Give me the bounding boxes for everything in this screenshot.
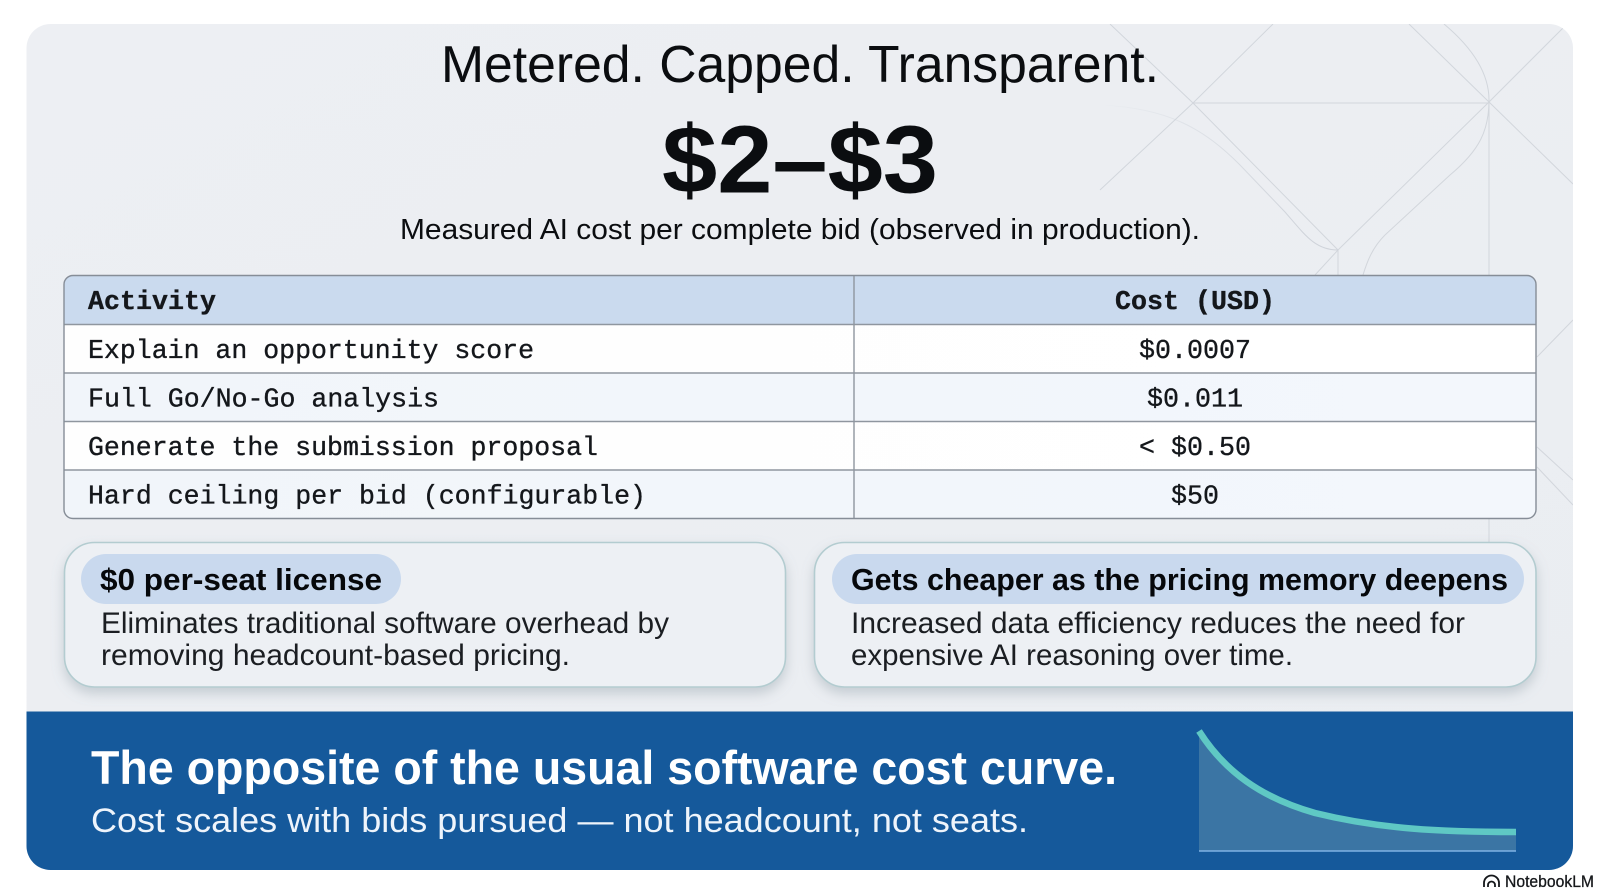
banner heading: The opposite of the usual software cost curve. xyxy=(91,741,1117,794)
table row: explain score: Explain an opportunity score xyxy=(88,336,534,366)
watermark: NotebookLM: NotebookLM xyxy=(1505,872,1594,891)
subtitle: Measured AI cost per complete bid (observed in production). xyxy=(400,214,1200,246)
table row: explain score: $0.0007 xyxy=(1139,336,1251,366)
panel: bottom banner xyxy=(26,712,1573,870)
table header xyxy=(88,287,1275,317)
table header: Activity xyxy=(88,287,216,317)
pill heading: per-seat license xyxy=(81,554,401,604)
table row: go/no-go: $0.011 xyxy=(1147,384,1243,414)
body text: per-seat license xyxy=(101,607,669,672)
body text: per-seat license: removing headcount-based pricing. xyxy=(101,639,570,672)
cost table xyxy=(64,275,1536,518)
pill heading: cheaper over time: Gets cheaper as the pricing memory deepens xyxy=(851,562,1508,597)
pill heading: cheaper over time xyxy=(832,554,1524,604)
table row: proposal xyxy=(88,433,1251,463)
body text: cheaper over time xyxy=(851,607,1465,672)
headline cost figure: $2–$3 xyxy=(662,106,938,214)
title: Metered. Capped. Transparent. xyxy=(441,36,1159,94)
chart: declining cost curve xyxy=(1199,731,1516,851)
body text: cheaper over time: expensive AI reasoning over time. xyxy=(851,639,1293,672)
table row: hard ceiling: $50 xyxy=(1171,482,1219,512)
body text: cheaper over time: Increased data efficiency reduces the need for xyxy=(851,607,1465,640)
table row: hard ceiling: Hard ceiling per bid (configurable) xyxy=(88,482,646,512)
table row: go/no-go xyxy=(88,384,1243,414)
body text: per-seat license: Eliminates traditional software overhead by xyxy=(101,607,669,640)
table row: hard ceiling xyxy=(88,482,1219,512)
table row: go/no-go: Full Go/No-Go analysis xyxy=(88,384,439,414)
banner subheading: Cost scales with bids pursued — not headcount, not seats. xyxy=(91,802,1028,840)
table row: proposal: Generate the submission proposal xyxy=(88,433,598,463)
table row: explain score xyxy=(88,336,1251,366)
panel: cheaper over time xyxy=(814,542,1536,687)
icon: NotebookLM logo xyxy=(1484,876,1499,887)
table header: Cost (USD) xyxy=(1115,287,1275,317)
panel: per-seat license xyxy=(64,542,786,687)
pill heading: per-seat license: $0 per-seat license xyxy=(100,562,382,597)
table row: proposal: < $0.50 xyxy=(1139,433,1251,463)
